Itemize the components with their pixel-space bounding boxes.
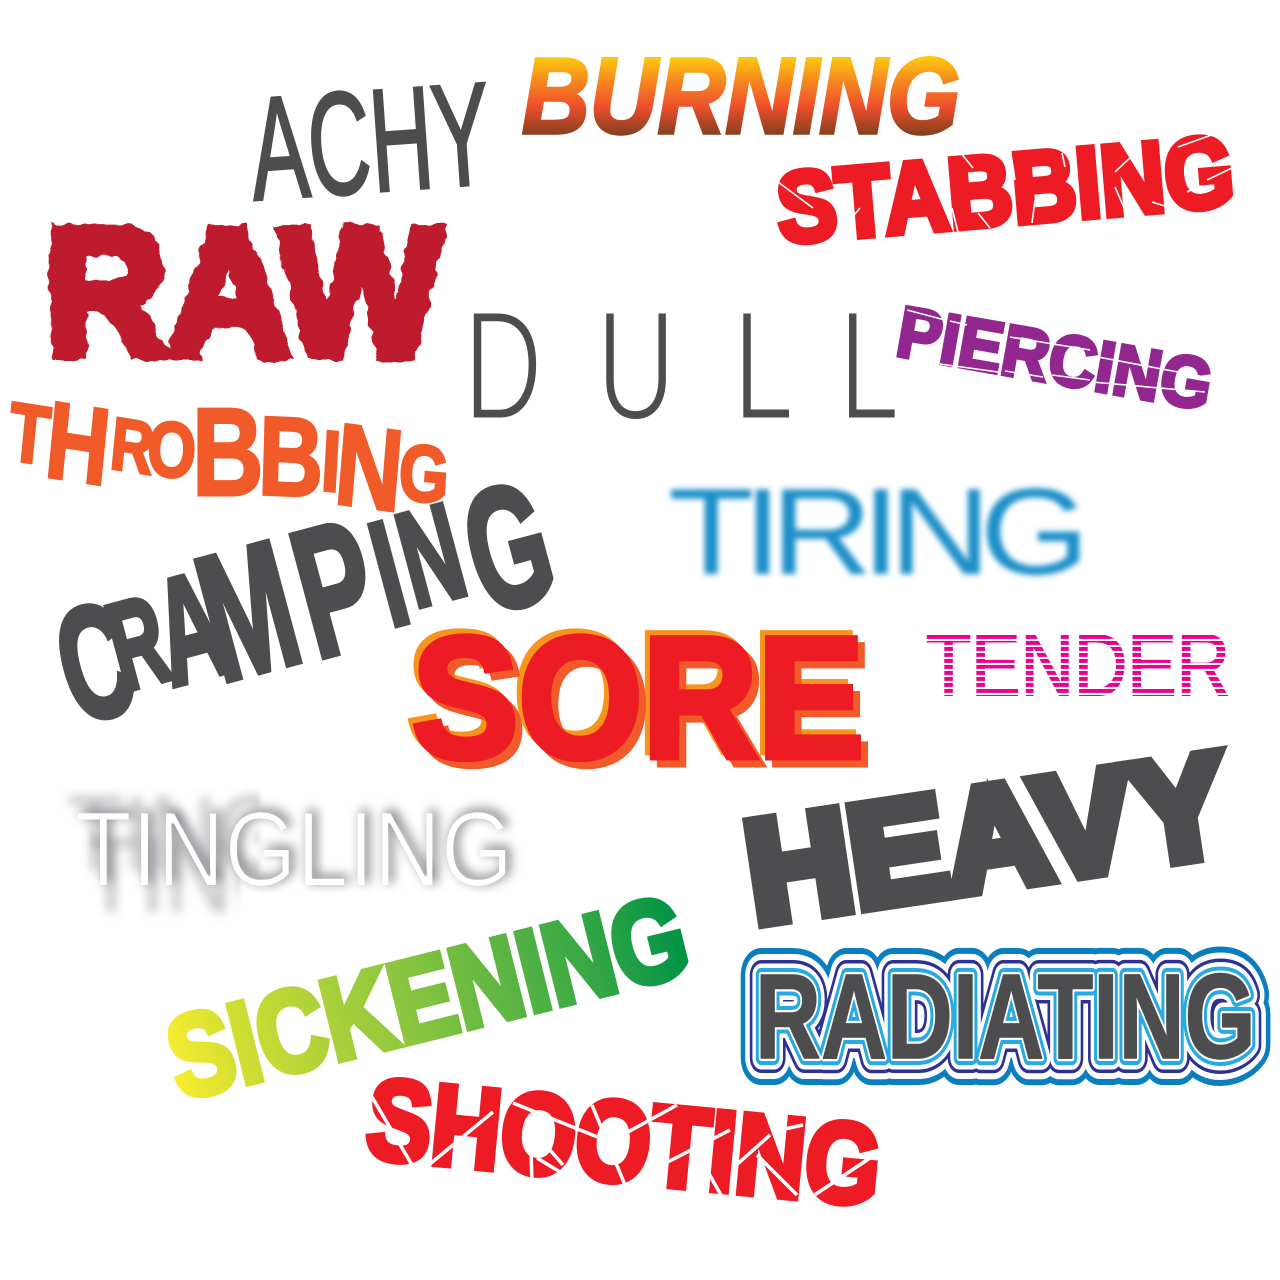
word: THROBBING: B: [192, 382, 264, 522]
word: RADIATING: RADIATING: [755, 949, 1256, 1084]
word: BURNING: BURNING: [522, 35, 960, 156]
word: THROBBING: B: [257, 394, 325, 521]
word: RADIATING: RADIATING: [755, 949, 1256, 1084]
word: SORE: SORE: [419, 609, 871, 801]
word: THROBBING: R: [107, 402, 158, 491]
word: RADIATING: RADIATING: [755, 949, 1256, 1084]
word: TIRING: TIRING: [668, 464, 1080, 601]
word: SORE: SORE: [407, 597, 859, 789]
word: CRAMPING: [33, 433, 572, 761]
word: THROBBING: [5, 378, 451, 537]
word: SORE: SORE: [412, 602, 864, 794]
word: HEAVY: HEAVY: [736, 723, 1238, 954]
word: SHOOTING: SHOOTING: [362, 1055, 886, 1230]
word: THROBBING: N: [331, 400, 408, 537]
word: DULL: DULL: [463, 277, 900, 453]
word: THROBBING: H: [41, 378, 115, 509]
word: TENDER: TENDER: [926, 617, 1230, 714]
word: RADIATING: RADIATING: [755, 949, 1256, 1084]
word: CRAMPING: I: [355, 490, 423, 659]
word: RADIATING: RADIATING: [755, 949, 1256, 1084]
word: ACHY: ACHY: [245, 52, 496, 231]
word: CRAMPING: P: [273, 480, 397, 697]
word: THROBBING: O: [146, 404, 198, 495]
word: STABBING: STABBING: [772, 115, 1238, 265]
word: RADIATING: RADIATING: [755, 949, 1256, 1084]
word: THROBBING: I: [319, 413, 343, 510]
word: CRAMPING: M: [179, 504, 317, 720]
word: RADIATING: RADIATING: [755, 949, 1256, 1084]
word: CRAMPING: N: [383, 474, 479, 636]
word: THROBBING: T: [5, 384, 54, 483]
word: PIERCING: PIERCING: [891, 292, 1218, 426]
word: CRAMPING: R: [94, 568, 182, 717]
word: CRAMPING: C: [39, 567, 152, 757]
word: CRAMPING: A: [137, 540, 243, 718]
word: CRAMPING: G: [445, 445, 572, 651]
word: THROBBING: G: [397, 427, 451, 521]
word: TINGLING: TINGLING: [75, 789, 513, 909]
word: RAW: RAW: [45, 192, 441, 393]
word: SICKENING: SICKENING: [155, 870, 700, 1124]
